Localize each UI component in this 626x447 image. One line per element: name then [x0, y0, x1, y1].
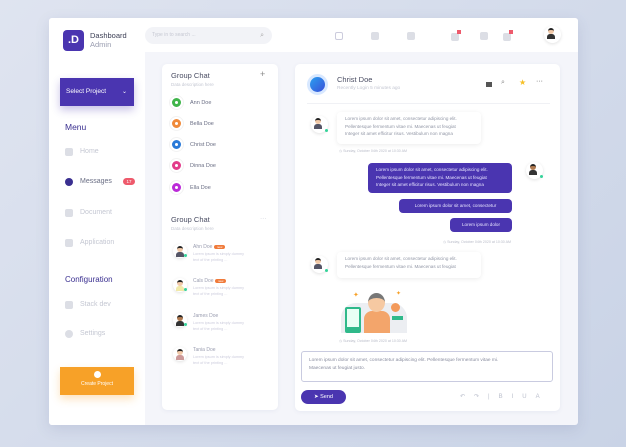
group chat panel: Data description here	[171, 82, 214, 87]
config items: Stack dev	[80, 301, 111, 308]
group chat panel	[162, 64, 278, 410]
chat previews: Ahn Doe new	[193, 244, 222, 250]
heading: Group Chat	[171, 71, 210, 80]
nav items: Document	[80, 209, 112, 216]
chat previews: Lorem ipsum is simply dummy	[193, 355, 244, 359]
illustration: ✦	[396, 291, 401, 297]
header action icons: ···	[536, 78, 543, 85]
nav items: Home	[80, 148, 99, 155]
chat previews	[172, 244, 244, 365]
configuration heading: Configuration	[65, 275, 113, 284]
chat previews: Lorem ipsum is simply dummy	[193, 286, 244, 290]
chat previews: Lorem ipsum is simply dummy	[193, 321, 244, 325]
chat panel: Pellentesque fermentum vitae mi. Maecenas ut feugiat	[345, 124, 456, 128]
contact list: Ella Doe	[190, 185, 211, 191]
formatting toolbar: ↶↷|BIUA	[460, 394, 549, 400]
header action icons	[486, 78, 543, 87]
nav items: 17	[126, 179, 132, 184]
config items: Settings	[80, 330, 105, 337]
header action icons: ★	[519, 78, 526, 87]
chat previews: text of the printing ...	[193, 327, 227, 331]
select project button	[60, 78, 134, 106]
contact list: Bella Doe	[190, 121, 214, 127]
message input: Lorem ipsum dolor sit amet, consectetur adipiscing elit. Pellentesque fermentum vitae mi.	[309, 358, 498, 363]
brand text: Dashboard	[90, 31, 127, 40]
nav items: Messages	[80, 178, 112, 185]
group chat panel: ···	[260, 215, 266, 222]
second heading: Group Chat	[171, 215, 210, 224]
header bar	[145, 18, 578, 52]
message 2 outgoing: Integer sit amet efficitur risus. Vestibulum non magna	[376, 182, 484, 187]
search	[145, 27, 272, 44]
chat panel: Lorem ipsum dolor sit amet, consectetur	[415, 203, 496, 208]
chat previews: text of the printing ...	[193, 361, 227, 365]
chat previews: text of the printing ...	[193, 292, 227, 296]
chat previews: James Doe	[193, 313, 218, 319]
contact list	[169, 95, 216, 195]
send button: ➤ Send	[314, 394, 333, 400]
message 2 outgoing: Pellentesque fermentum vitae mi. Maecenas ut feugiat	[376, 174, 487, 180]
user avatar	[544, 26, 561, 43]
create project button	[60, 367, 134, 395]
contact list: Christ Doe	[190, 142, 216, 148]
chat panel: Lorem ipsum dolor sit amet, consectetur adipiscing elit.	[345, 116, 457, 121]
send button	[301, 390, 346, 404]
message input: Maecenas ut feugiat justo.	[309, 366, 365, 371]
illustration	[341, 290, 407, 333]
chat panel: Lorem ipsum dolor	[462, 222, 500, 227]
sidebar	[49, 18, 145, 425]
chat panel: ◷ Sunday, October 04th 2020 at 10:30 AM	[443, 240, 511, 244]
chat panel: Lorem ipsum dolor sit amet, consectetur adipiscing elit.	[345, 256, 457, 261]
chat previews: Lorem ipsum is simply dummy	[193, 252, 244, 256]
config items	[65, 300, 111, 338]
message 2 outgoing: Lorem ipsum dolor sit amet, consectetur adipiscing elit.	[376, 167, 488, 172]
chat panel: ◷ Sunday, October 04th 2020 at 10:30 AM	[339, 149, 407, 153]
logo	[63, 30, 84, 51]
message 1	[311, 116, 328, 133]
menu heading: Menu	[65, 122, 86, 132]
chat previews: Tania Doe	[193, 347, 216, 353]
group chat panel: +	[260, 69, 265, 79]
chat panel: Christ Doe	[337, 75, 372, 84]
illustration: ✦	[353, 292, 359, 299]
dashboard card	[49, 18, 578, 425]
chat header	[307, 74, 328, 95]
brand text: Admin	[90, 40, 111, 49]
header icons	[335, 30, 513, 41]
chat panel: Integer sit amet efficitur risus. Vestibulum non magna	[345, 131, 453, 136]
chat panel: ◷ Sunday, October 04th 2020 at 10:30 AM	[339, 339, 407, 343]
search: Type in to search ...	[152, 32, 196, 38]
select project button: ⌄	[122, 89, 127, 95]
contact list: Dinna Doe	[190, 163, 216, 169]
header action icons: ⌕	[501, 79, 505, 86]
nav items: Application	[80, 239, 114, 246]
chat panel	[295, 64, 560, 411]
select project button: Select Project	[66, 88, 106, 95]
chat previews: Cals Doe new	[193, 278, 223, 284]
nav items	[65, 148, 135, 247]
brand text	[90, 31, 127, 49]
message 3	[311, 256, 328, 273]
create project button: Create Project	[81, 381, 113, 387]
chat panel: Pellentesque fermentum vitae mi. Maecenas ut feugiat	[345, 264, 456, 268]
message 2 outgoing	[368, 163, 512, 193]
chat panel: Recently Login 5 minutes ago	[337, 86, 400, 91]
contact list: Ann Doe	[190, 100, 211, 106]
chat previews: text of the printing ...	[193, 258, 227, 262]
message input	[301, 351, 553, 382]
search: ⌕	[260, 32, 264, 39]
logo: .D	[68, 34, 79, 46]
group chat panel: Data description here	[171, 226, 214, 231]
